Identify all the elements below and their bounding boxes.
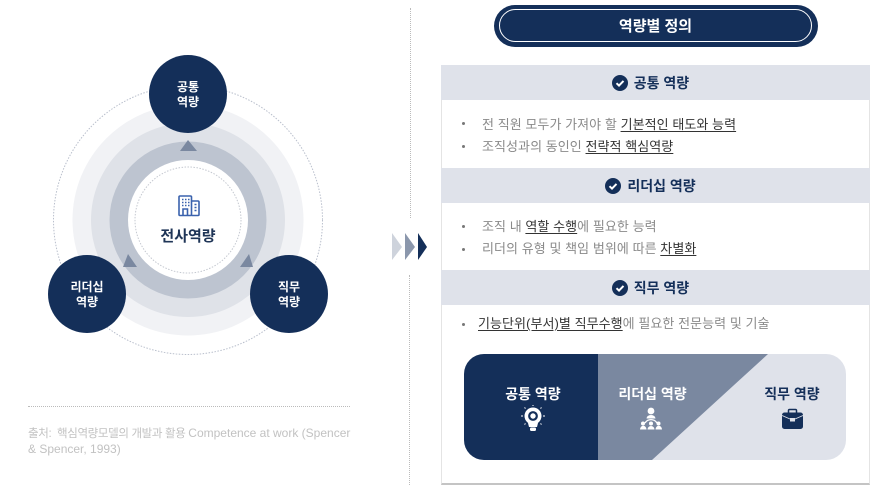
arrows: three chevrons <box>392 233 427 260</box>
heading: job competency: 직무 역량 <box>634 280 689 296</box>
node: job competency <box>250 255 328 333</box>
node: job competency: 역량 <box>278 295 300 309</box>
footnote: source: 출처: 핵심역량모델의 개발과 활용 Competence at work (Spencer <box>28 426 350 440</box>
node: job competency: 직무 <box>278 280 300 294</box>
heading: common competency <box>441 65 870 100</box>
text: common competency bullets <box>462 117 736 154</box>
footnote: source: & Spencer, 1993) <box>28 442 121 456</box>
text: leadership bullets <box>462 219 696 256</box>
text: common competency bullets: 조직성과의 동인인 전략적 핵심역량 <box>482 139 673 154</box>
heading: leadership competency: 리더십 역량 <box>627 178 696 194</box>
node: leadership competency: 리더십 <box>70 280 104 294</box>
divider: vertical dotted line, upper <box>410 8 411 218</box>
title pill: 역량별 정의 <box>619 18 692 35</box>
icon: briefcase <box>782 410 803 429</box>
node: leadership competency: 역량 <box>76 295 98 309</box>
text: common competency bullets: 전 직원 모두가 가져야 할 기본적인 태도와 능력 <box>482 117 736 132</box>
divider: vertical dotted line, lower <box>409 275 410 485</box>
footnote: source <box>28 406 350 457</box>
icon: people group <box>640 408 662 430</box>
node: common competency: 공통 <box>177 80 199 94</box>
icon: building <box>179 196 199 216</box>
label: common: 공통 역량 <box>505 386 561 402</box>
label: center title: 전사역량 <box>160 228 216 245</box>
heading: job competency <box>441 270 870 305</box>
icon: gear lightbulb <box>521 405 545 431</box>
text: leadership bullets: 조직 내 역할 수행에 필요한 능력 <box>482 219 657 234</box>
arrow: right triangle <box>240 254 253 267</box>
label: leadership: 리더십 역량 <box>618 386 687 402</box>
arrow: top triangle <box>180 140 197 151</box>
text: job bullets: 기능단위(부서)별 직무수행에 필요한 전문능력 및 기술 <box>478 316 770 331</box>
chart: competency composition band <box>464 354 846 460</box>
panel: definitions <box>441 65 870 485</box>
node: common competency: 역량 <box>177 95 199 109</box>
diagram: competency circles <box>48 55 328 355</box>
heading: leadership competency <box>441 168 870 203</box>
arrow: left triangle <box>123 254 137 267</box>
text: leadership bullets: 리더의 유형 및 책임 범위에 따른 차별화 <box>482 241 696 256</box>
label: job: 직무 역량 <box>764 386 820 402</box>
node: common competency <box>149 55 227 133</box>
title pill <box>494 5 818 47</box>
node: leadership competency <box>48 255 126 333</box>
heading: common competency: 공통 역량 <box>634 75 689 91</box>
